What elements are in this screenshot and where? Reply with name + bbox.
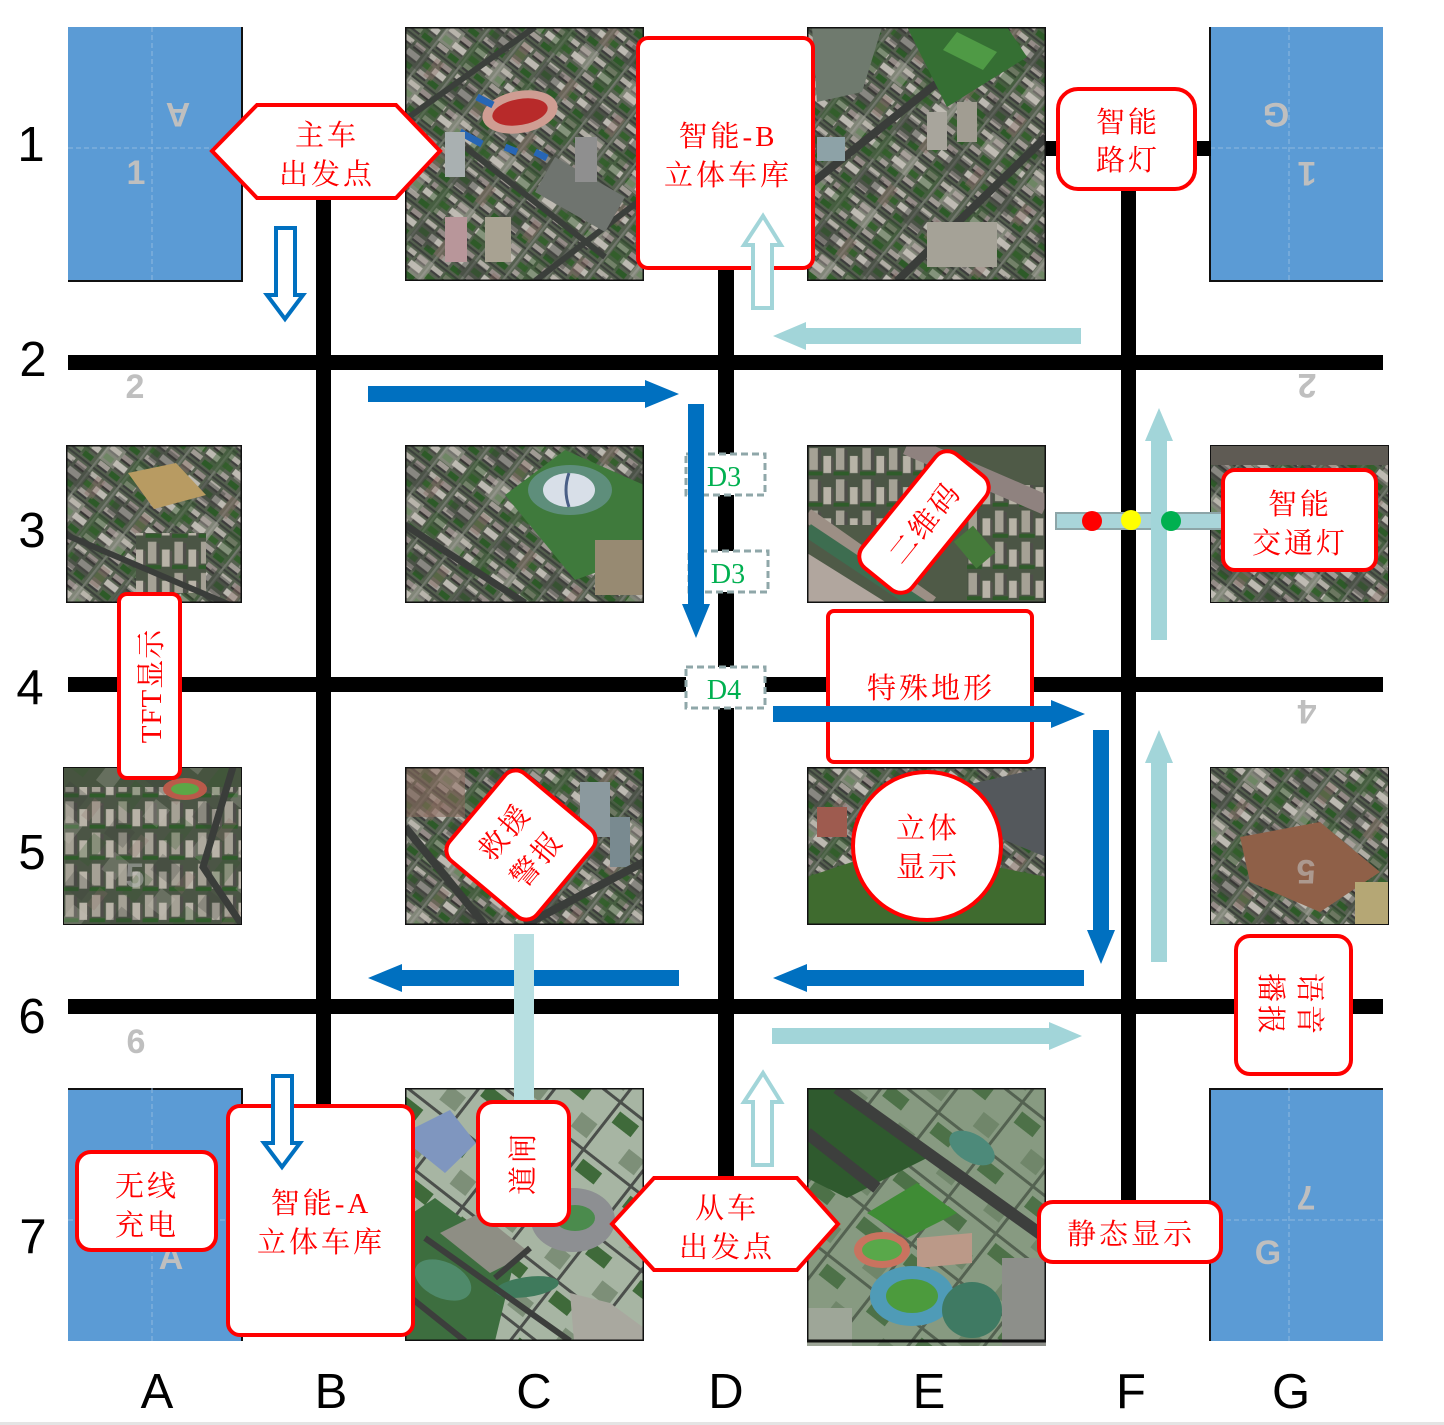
start point: main car: 出发点: [279, 158, 375, 191]
arrow: teal left top: [773, 322, 1081, 350]
rescue alarm: 警报: [504, 824, 571, 894]
arrow: blue left lower right: [773, 964, 1084, 992]
aerial image A5: [63, 767, 242, 925]
panel: blue zone G1: G: [1263, 95, 1289, 133]
arrow: blue right upper: [368, 380, 679, 408]
column labels: A: [141, 1365, 174, 1419]
arrow: outline up lower: [744, 1073, 781, 1165]
start point: secondary car: [612, 1178, 838, 1270]
garage A: [228, 1106, 413, 1335]
smart traffic light label: 交通灯: [1252, 527, 1348, 560]
arrow: blue right middle: [773, 700, 1085, 728]
gray label: row 2 right: 2: [1298, 366, 1316, 404]
garage B: 立体车库: [664, 159, 792, 192]
column labels: F: [1116, 1365, 1146, 1419]
start point: secondary car: 从车: [695, 1192, 759, 1225]
smart street lamp: 智能: [1096, 106, 1160, 139]
barrier gate: 道闸: [507, 1131, 540, 1195]
rescue alarm: [441, 765, 601, 925]
start point: main car: 主车: [295, 119, 359, 152]
traffic light: [1056, 513, 1224, 529]
static display: 静态显示: [1067, 1218, 1195, 1251]
garage B: 智能-B: [678, 120, 778, 153]
arrow: outline down upper: [267, 228, 303, 319]
wireless charging: 充电: [115, 1209, 179, 1242]
label: special terrain: 特殊地形: [867, 672, 995, 705]
arrow: blue left lower left: [368, 964, 679, 992]
wireless charging: [77, 1152, 216, 1250]
smart traffic light label: 智能: [1268, 488, 1332, 521]
arrow: blue down D: [682, 404, 710, 638]
voice broadcast: 语音: [1293, 973, 1326, 1037]
row labels: 3: [18, 504, 46, 558]
aerial image G3: [1210, 445, 1389, 603]
3D display: 显示: [896, 852, 960, 884]
arrow: teal up F lower: [1145, 730, 1173, 962]
wireless charging: 无线: [115, 1170, 179, 1203]
panel: blue zone G7: [1210, 1088, 1383, 1341]
gray label: row 4 right: 4: [1297, 692, 1316, 730]
column labels: B: [315, 1365, 347, 1419]
gray label: row 6 left: 6: [127, 1023, 145, 1061]
panel: blue zone G1: 1: [1298, 154, 1316, 192]
panel: blue zone G1: [1210, 27, 1383, 281]
row labels: 1: [17, 118, 45, 172]
traffic light lamps: [1082, 510, 1181, 531]
column labels: E: [913, 1365, 945, 1419]
panel: blue zone G7: 7: [1297, 1178, 1315, 1216]
column labels: G: [1272, 1365, 1310, 1419]
column labels: C: [516, 1365, 552, 1419]
panel: blue zone A1: A: [166, 95, 190, 133]
aerial image E5: [807, 767, 1046, 925]
aerial image G5: [1210, 767, 1389, 925]
arrow: outline down lower: [264, 1076, 300, 1167]
smart street lamp: 路灯: [1096, 144, 1160, 177]
garage A: 立体车库: [257, 1226, 385, 1259]
arrow: blue down F: [1087, 730, 1115, 964]
start point: secondary car: 出发点: [679, 1231, 775, 1264]
node marker D3 lower: [689, 551, 768, 592]
row labels: 6: [18, 990, 46, 1044]
node marker D3 upper: D3: [707, 462, 741, 493]
garage A: 智能-A: [271, 1187, 371, 1220]
aerial image E1: [807, 27, 1046, 281]
aerial image G5: 5: [1297, 852, 1315, 890]
column labels: D: [708, 1365, 744, 1419]
row labels: 2: [19, 333, 47, 387]
row labels: 7: [19, 1210, 47, 1264]
barrier bar: [514, 934, 534, 1104]
road grid: [68, 141, 1383, 1205]
start point: main car: [212, 105, 440, 198]
node marker D4: D4: [707, 675, 741, 706]
node marker D4: [686, 667, 765, 708]
row labels: 4: [16, 661, 44, 715]
panel: blue zone A1: 1: [127, 154, 145, 192]
TFT display: [119, 594, 180, 778]
gray label: row 2 left: 2: [126, 368, 144, 406]
voice broadcast: [1236, 936, 1351, 1074]
garage B: [638, 38, 813, 268]
arrow: teal right bottom: [772, 1022, 1082, 1050]
QR code label: 二维码: [882, 475, 968, 571]
barrier gate: [478, 1102, 569, 1225]
arrow: teal up F upper: [1145, 408, 1173, 640]
3D display: 立体: [896, 812, 960, 845]
panel: blue zone A1: [68, 27, 242, 281]
aerial image A3: [66, 445, 242, 603]
aerial image E3: [807, 445, 1046, 603]
row labels: 5: [18, 826, 46, 880]
static display: [1039, 1202, 1221, 1262]
row labels: [16, 118, 47, 1264]
node marker D3 lower: D3: [711, 559, 745, 590]
node marker D3 upper: [686, 454, 765, 495]
column labels: [141, 1365, 1310, 1419]
aerial image C5: [405, 767, 644, 925]
aerial image C3: [405, 445, 644, 603]
aerial image C1: [405, 27, 644, 281]
arrow: outline up upper: [744, 216, 781, 308]
panel: blue zone A7: A: [159, 1239, 183, 1277]
panel: blue zone A7: [68, 1088, 242, 1341]
smart traffic light label: [1223, 470, 1376, 570]
aerial image E7: [807, 1088, 1046, 1346]
panel: blue zone G7: G: [1255, 1234, 1281, 1272]
voice broadcast: 播报: [1254, 973, 1287, 1037]
aerial image C7: [405, 1088, 644, 1341]
QR code label: [853, 445, 995, 599]
aerial image A5: 5: [126, 857, 144, 895]
smart street lamp: [1058, 89, 1195, 189]
TFT display: TFT显示: [136, 629, 168, 743]
label: special terrain: [828, 611, 1032, 762]
3D display: [853, 772, 1001, 920]
rescue alarm: 救援: [472, 797, 539, 867]
